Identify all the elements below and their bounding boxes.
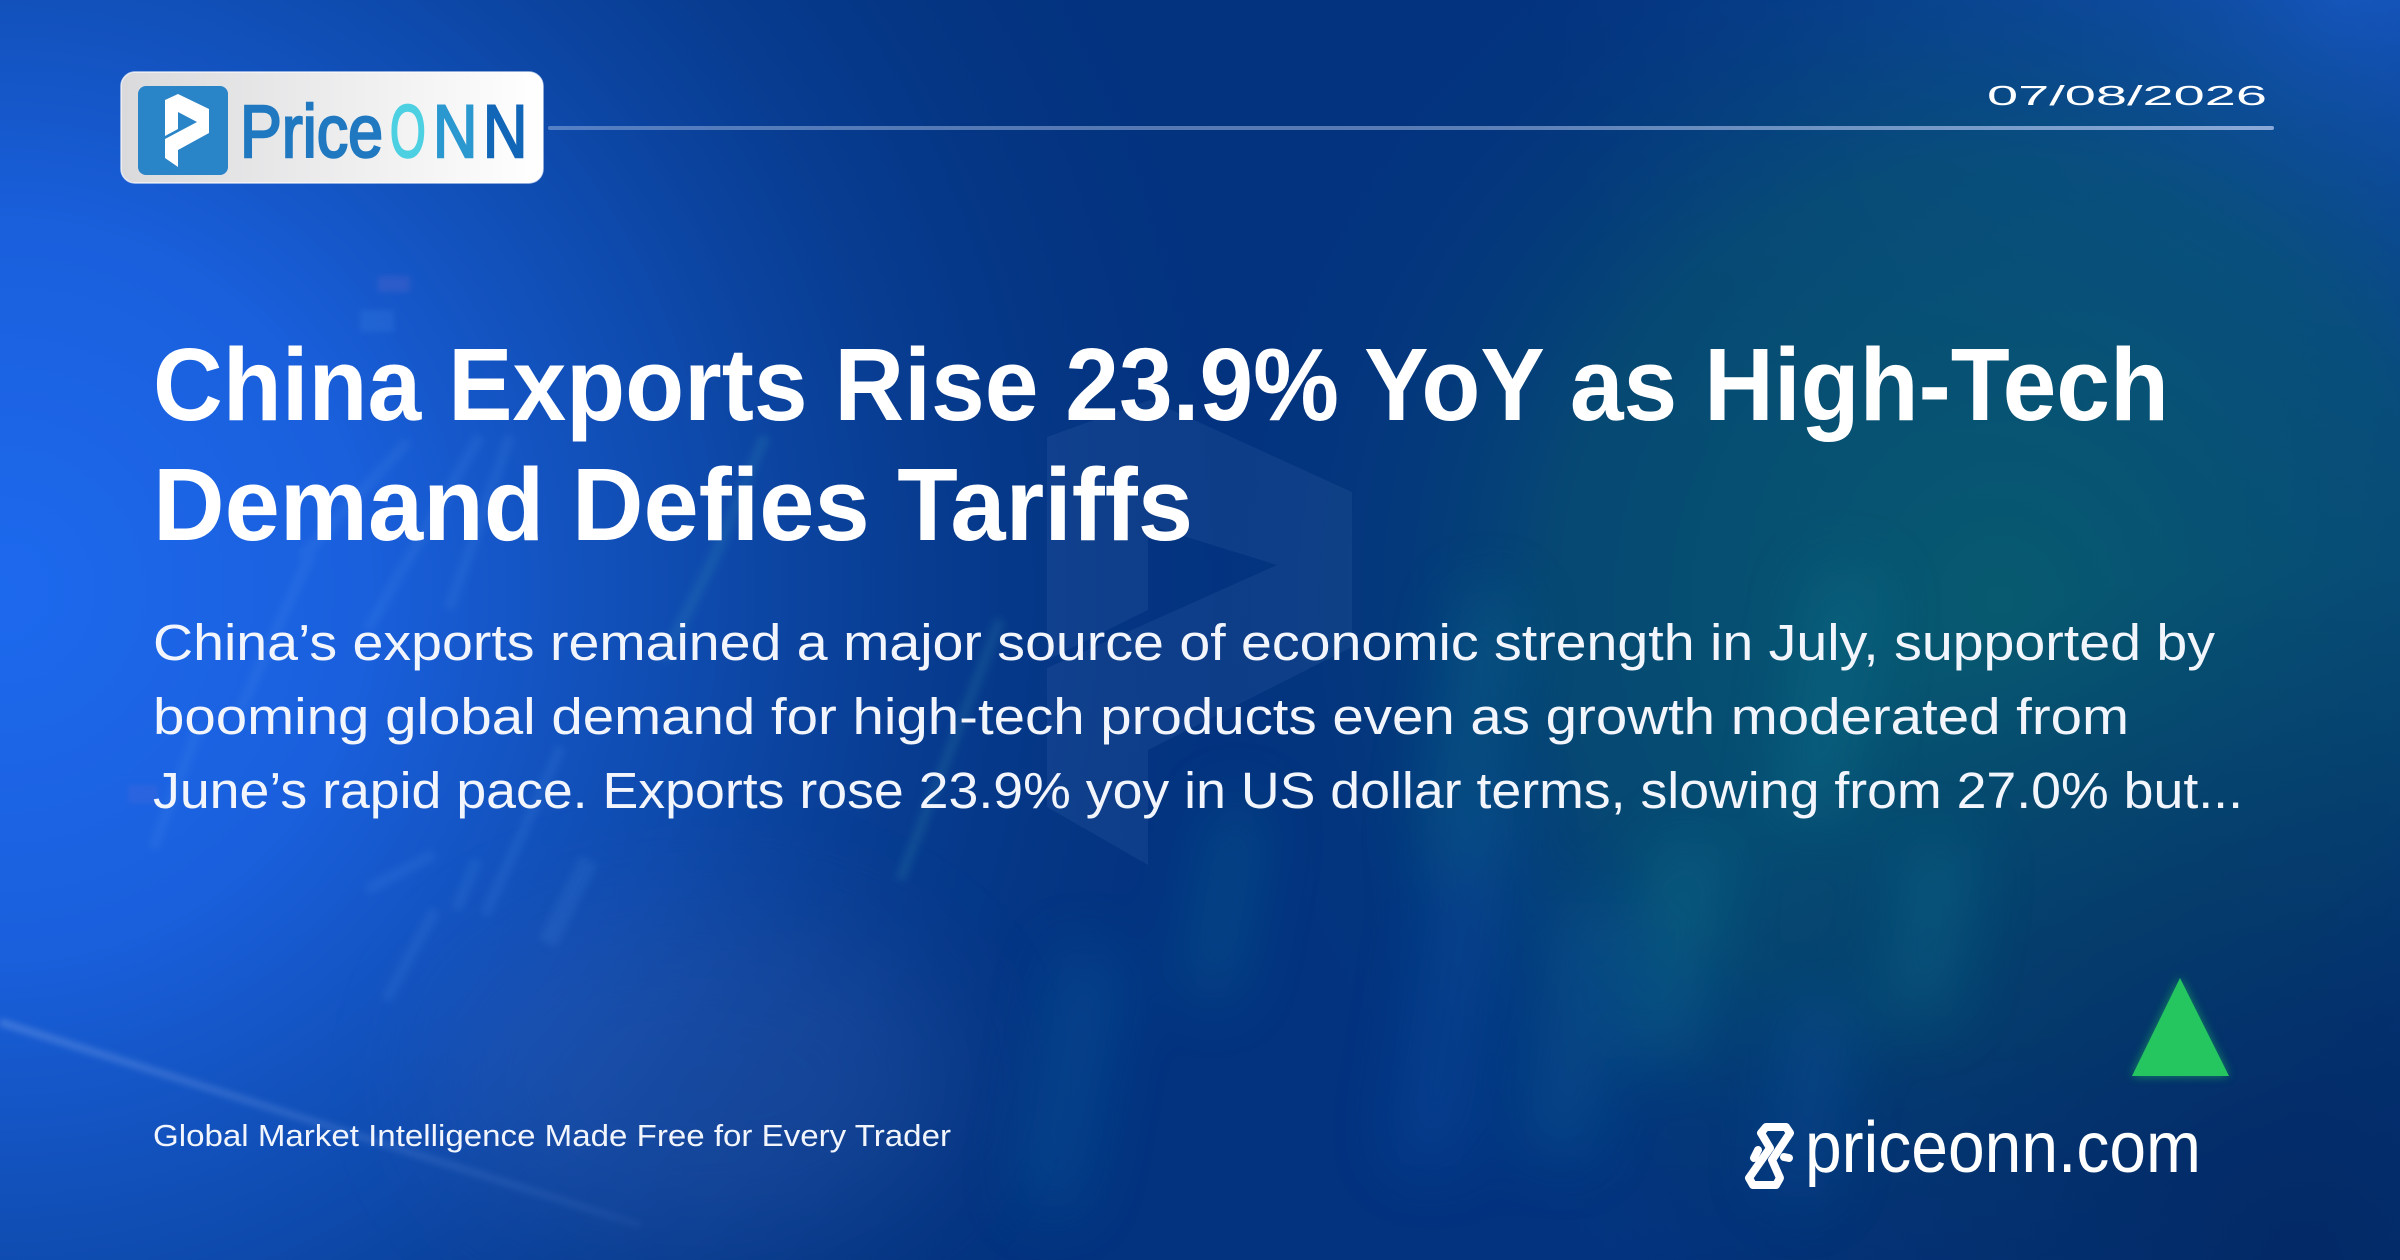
logo badge xyxy=(121,72,543,183)
brand url xyxy=(1749,1108,2201,1188)
icon: brand mark xyxy=(1749,1127,1790,1185)
logo wordmark: N xyxy=(433,91,477,173)
background: left candlesticks xyxy=(153,436,1000,1000)
title: China Exports Rise 23.9% YoY as High-Tech xyxy=(153,327,2169,442)
title xyxy=(153,327,2169,562)
date: 07/08/2026 xyxy=(1987,80,2267,111)
url text: priceonn.com xyxy=(1805,1108,2201,1188)
up arrow xyxy=(2132,978,2229,1076)
logo wordmark: O xyxy=(390,91,426,174)
watermark: play logo xyxy=(1047,400,1352,865)
summary text xyxy=(153,614,2243,819)
title: Demand Defies Tariffs xyxy=(153,447,1193,562)
logo wordmark: Price xyxy=(240,90,383,173)
summary text: China’s exports remained a major source of economic strength in July, supported by xyxy=(153,614,2216,671)
header rule xyxy=(548,126,2274,130)
logo icon xyxy=(138,86,228,175)
background: trend streak xyxy=(0,1022,640,1225)
summary text: booming global demand for high-tech products even as growth moderated from xyxy=(153,688,2129,745)
background: right candlesticks xyxy=(1018,566,1979,1213)
logo wordmark xyxy=(240,90,527,174)
tagline: Global Market Intelligence Made Free for Every Trader xyxy=(153,1118,951,1153)
summary text: June’s rapid pace. Exports rose 23.9% yoy in US dollar terms, slowing from 27.0% but... xyxy=(153,762,2243,819)
logo wordmark: N xyxy=(483,91,527,173)
